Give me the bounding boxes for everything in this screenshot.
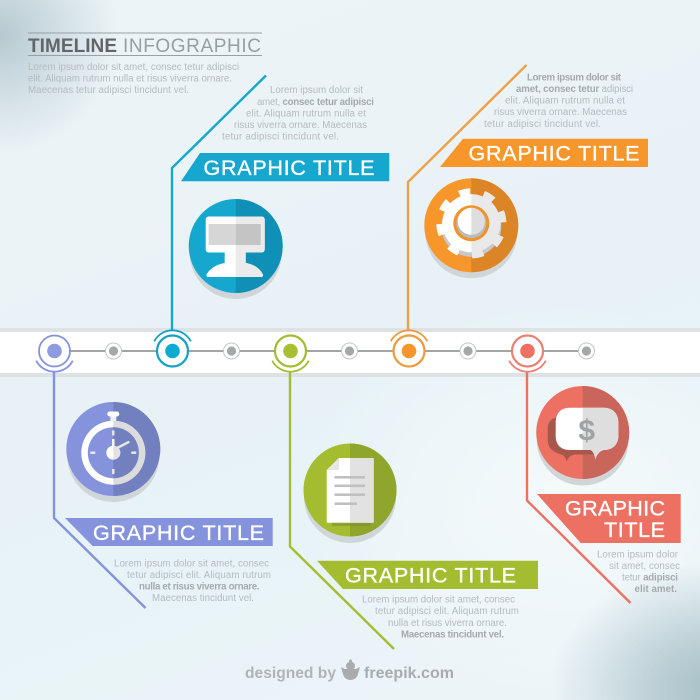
heading: timeline infographic [28, 36, 261, 57]
text block: orange: elit. Aliquam rutrum nulla et [505, 96, 625, 106]
footer credit: designed by [245, 665, 336, 682]
icon: freepik logo [341, 660, 360, 680]
leader line: red [527, 372, 630, 603]
small node 3 [342, 343, 358, 359]
leader line: green [290, 372, 394, 649]
small node 2 [224, 343, 240, 359]
intro text: Maecenas tetur adipisci tincidunt vel. [28, 85, 189, 96]
heading: timeline infographic: TIMELINE [28, 36, 117, 57]
panel: red title: GRAPHIC [565, 497, 665, 521]
icon: gear [424, 178, 518, 278]
text block: purple: Lorem ipsum dolor sit amet, consec [114, 558, 269, 570]
text block: red [597, 550, 680, 595]
node: orange [391, 330, 427, 366]
panel: green title: GRAPHIC TITLE [345, 564, 516, 588]
leader line: purple [54, 372, 146, 608]
text block: green: nulla et risus viverra ornare. [388, 618, 507, 629]
panel: orange title: GRAPHIC TITLE [468, 142, 640, 166]
text block: purple: tetur adipisci elit. Aliquam rutrum [127, 570, 271, 581]
text block: red: elit amet. [634, 584, 677, 595]
text block: blue: elit. Aliquam rutrum nulla et [246, 108, 366, 120]
footer credit [245, 660, 454, 682]
timeline band [0, 328, 700, 377]
text block: blue: Lorem ipsum dolor sit [270, 85, 363, 96]
text block: red: tetur adipisci [622, 572, 678, 584]
icon: document [304, 444, 396, 543]
text block: blue [222, 85, 374, 142]
node: red [509, 336, 546, 372]
text block: green: tetur adipisci elit. Aliquam rutrum [375, 606, 519, 617]
text block: blue: tetur adipisci tincidunt vel. [222, 132, 339, 142]
text block: green: Maecenas tincidunt vel. [401, 630, 504, 640]
small node 5 [578, 343, 594, 359]
timeline connector [55, 350, 586, 352]
text block: red: sit amet, consec [609, 561, 680, 572]
icon: stopwatch [66, 402, 160, 502]
panel: green title [317, 561, 538, 589]
leader line: blue [172, 76, 266, 331]
heading: timeline infographic: INFOGRAPHIC [123, 36, 261, 57]
text block: orange: Lorem ipsum dolor sit [527, 72, 622, 84]
intro text: Lorem ipsum dolor sit amet, consec tetur adipisci [28, 62, 239, 73]
panel: blue title [181, 153, 389, 181]
node: blue [154, 330, 191, 366]
text block: green [362, 594, 519, 640]
panel: red title: TITLE [604, 518, 665, 542]
leader line: orange [408, 65, 526, 331]
dollar sign: $ [578, 414, 595, 448]
panel: orange title [440, 139, 648, 167]
text block: orange: amet, consec tetur adipisci [516, 84, 633, 95]
text block: purple: Maecenas tincidunt vel. [152, 593, 254, 604]
small node 1 [106, 343, 122, 359]
small node 4 [460, 343, 476, 359]
footer credit: freepik.com [364, 665, 454, 682]
text block: purple [114, 558, 271, 604]
text block: purple: nulla et risus viverra ornare. [139, 582, 260, 592]
panel: red title [537, 494, 681, 543]
node: purple [36, 336, 73, 372]
text block: orange [484, 72, 633, 130]
text block: blue: amet, consec tetur adipisci [257, 97, 374, 108]
icon: speech bubble [536, 386, 629, 486]
text block: orange: tetur adipisci tincidunt vel. [484, 119, 601, 130]
node: green [272, 336, 309, 372]
title block [28, 33, 262, 96]
icon: monitor [189, 199, 283, 299]
text block: green: Lorem ipsum dolor sit amet, consec [362, 594, 515, 606]
panel: purple title: GRAPHIC TITLE [93, 521, 264, 545]
intro text [28, 62, 239, 96]
text block: orange: risus viverra ornare. Maecenas [494, 107, 627, 118]
text block: blue: risus viverra ornare. Maecenas [234, 120, 367, 131]
text block: red: Lorem ipsum dolor [597, 550, 679, 560]
panel: blue title: GRAPHIC TITLE [204, 156, 374, 180]
intro text: elit. Aliquam rutrum nulla et risus viverra ornare. [28, 74, 232, 84]
